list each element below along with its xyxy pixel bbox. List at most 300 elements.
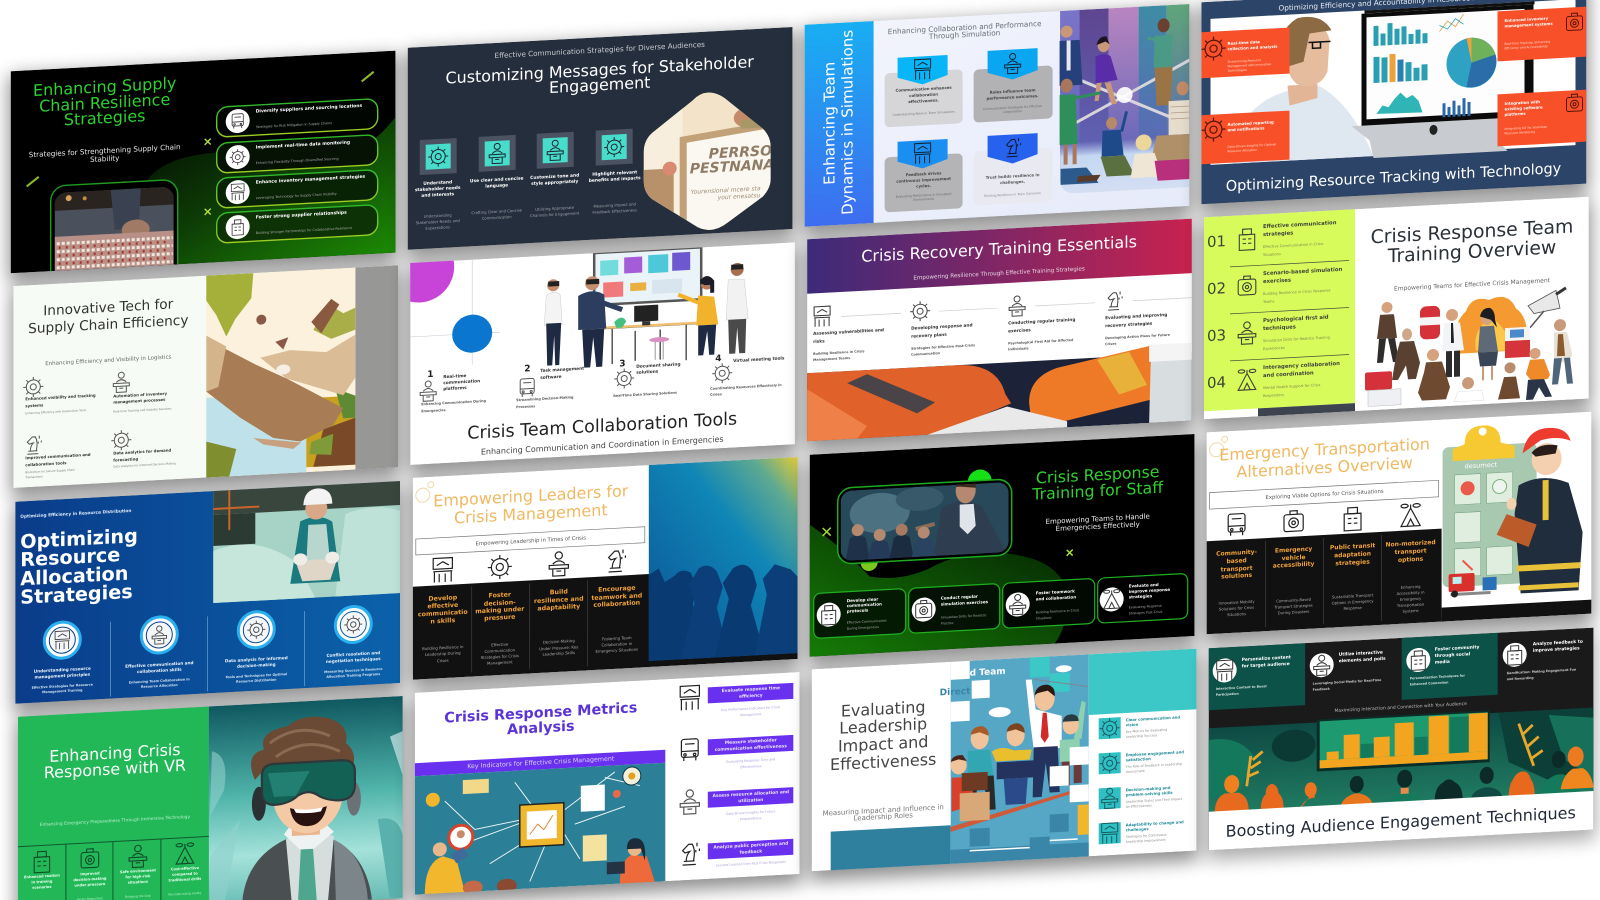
box 4: Strategies Post-Crisis [1129,610,1163,616]
decorative rings [1210,436,1228,457]
callout: software integration [1498,90,1586,146]
column 3 [225,610,288,684]
subtitle: Empowering Teams to Handle [1046,512,1150,526]
tool 2: Task management [540,365,584,374]
item 01: Effective Communication in Crisis [1263,242,1324,249]
tool 1: Enhancing Communication During [421,399,487,406]
column 4 [589,128,641,214]
photo: personalised sign: Yourensional mcere sta [691,185,761,196]
column 3: Utilizing Appropriate [535,204,575,211]
item 3: on Effectiveness [1126,803,1152,809]
column 3: Leadership Skills [542,649,575,656]
column 4: benefits and impacts [589,175,641,183]
item 04: and coordination [1263,370,1314,379]
title: Evaluating [841,697,926,720]
card 2 [974,47,1053,123]
tactic 3 [1406,644,1480,687]
illustration: firefighter with checklist [1443,420,1583,598]
item 1: Leadership Success [1126,733,1157,739]
item: communication tools: collaboration tools [25,460,67,467]
image: leader silhouettes on gradient [649,457,798,661]
illustration: leaders climbing stairs: Lead Team [952,667,1006,680]
column 4: transport [1395,547,1427,556]
column 3: Under Pressure: Key [539,644,579,651]
tool 2: software [540,373,562,381]
item: inventory: Enhance inventory management strategies [256,174,366,186]
column 1: effective [427,601,458,610]
card 2: Roles influence team [990,87,1036,94]
metric 2: Evaluating Response Time and [726,757,775,764]
column 3: style appropriately [531,178,578,187]
step 4: Developing Action Plans for Future [1105,333,1171,340]
column 4: Conflict resolution and [326,650,380,657]
decorative rings [416,482,434,503]
item: diversify suppliers [217,99,378,137]
eyebrow: Optimizing Efficiency in Resource Distribution [20,508,131,520]
column 1: Community- [1216,548,1258,557]
callout: real-time data: collection and analysis [1228,43,1278,51]
column 1 [415,138,461,231]
metric 2: communication effectiveness [715,743,787,753]
metric 1: efficiency [739,692,763,699]
box 4 [1098,573,1188,623]
subtitle: Empowering Teams for Effective Crisis Management [1394,277,1551,293]
title: Crisis Management [454,500,608,527]
subtitle: Leadership Roles [854,811,913,823]
column 2: Use clear and concise [470,175,524,184]
panel: response team training overview [1202,196,1591,429]
column 3: Customize tone and [530,172,579,181]
step 3: Individuals [1008,346,1028,351]
column 4: Transportation [1396,601,1425,608]
column 2: Management [487,659,513,665]
column 3 [534,551,584,657]
card 1: Understanding Roles in Team Simulations [893,110,955,117]
benefit 3: for high-risk [125,874,151,879]
tactic 4: improve strategies [1533,645,1580,653]
title: Crisis Response Team [1371,216,1573,248]
tactic 2 [1310,649,1386,692]
item 4: Strategies for Continuous [1126,833,1167,839]
item 04: Interagency collaboration [1263,361,1340,371]
title: Optimizing Resource Tracking with Technology [1226,161,1562,195]
subtitle: Measuring Impact and Influence in [823,803,944,818]
callout: software integration: existing software [1504,104,1543,111]
item 1: Clear communication and [1126,714,1180,722]
item: communication tools: Blockchain for Secure Supply Chain [25,468,75,474]
tactic 3: through social [1435,651,1471,659]
benefit 2: Improved [80,871,100,876]
item 01: 01 [1207,232,1226,251]
step 2: Communication [911,351,941,357]
subtitle box [416,527,645,555]
column 2: Communication [482,214,512,220]
subtitle: Enhancing Emergency Preparedness Through Immersive Technology [40,814,190,828]
column 3: Resource Distribution [236,678,277,684]
title: Training Overview [1387,237,1556,267]
photo: domino figures [50,179,178,272]
tactic 1: Participation [1216,692,1239,697]
panel: boosting audience engagement [1207,627,1596,860]
item 2: satisfaction [1126,756,1151,762]
box 1: protocols [847,607,869,613]
panel: empowering leaders [411,457,800,690]
item: data analytics [111,427,176,469]
column 1 [418,557,468,664]
tool 4: Coordinating Resources Effectively in [710,383,782,391]
column 4: negotiation techniques [326,656,381,663]
item 3 [1099,784,1183,810]
column 2: decision- [484,599,516,607]
column 4: Encourage [598,584,636,593]
card 1 [885,54,963,127]
decorative half circles [861,469,992,571]
illustration: metrics network [415,763,665,898]
box 3: and collaboration [1036,594,1076,601]
column 3: Tools and Techniques for Optimal [225,672,287,679]
tactic 3: Enhanced Connection [1410,680,1449,686]
photo: personalised sign: PESTNANA [690,157,774,178]
item: diversify suppliers: Diversify suppliers and sourcing locations [256,103,362,115]
item: diversify suppliers: Strategies for Risk Mitigation in Supply Chains [256,121,332,129]
tool 3 [613,356,681,398]
subtitle: Empowering Resilience Through Effective Training Strategies [913,266,1085,282]
panel: crisis recovery training [805,218,1194,451]
illustration: audience watching rising chart [1209,705,1594,813]
column 3: Response [1343,604,1362,610]
column 3: Options in Emergency [1332,598,1374,605]
callout: automated reporting: Data-Driven Insights for Optimal [1228,142,1276,149]
item 03: Psychological first aid [1263,315,1329,324]
item 04 [1207,361,1340,401]
column 2: vehicle [1282,553,1306,562]
column 2: Effective [491,641,509,647]
title: Engagement [549,72,650,97]
column 1: Understand [423,179,452,186]
item 4: challenges [1126,826,1149,832]
callout: inventory systems: Efficiency and Accountability [1504,44,1548,50]
benefit 1: Enhanced realism [24,873,60,879]
subtitle box [1210,480,1439,509]
column 4: Systems [1403,607,1419,613]
header band [807,219,1192,294]
item: communication tools: Improved communication and [25,451,91,460]
subtitle: Maximizing Interaction and Connection with Your Audience [1334,701,1467,714]
metric 2 [681,734,793,772]
item: real-time data: Implement real-time data monitoring [256,140,350,151]
box 1: Effective Communication [847,619,887,625]
subtitle: Stability [90,153,120,164]
column 4 [1386,503,1436,614]
item: inventory [217,170,378,208]
callout: automated reporting: and notifications [1228,125,1265,132]
panel: crisis team collaboration tools [386,214,797,476]
title: Strategies [20,579,133,608]
column 1: solutions [1221,571,1252,580]
tactic 4: and Rewarding [1507,676,1534,681]
tool 4: 4 [715,354,721,364]
callout: inventory systems: Enhanced inventory [1504,15,1549,22]
column 4: Enhancing [1401,583,1421,589]
item 2: The Role of Feedback in Leadership [1125,762,1182,769]
item 2: Employee engagement and [1126,749,1184,757]
tool 4 [710,351,785,397]
illustration: VR team at a board [544,245,748,370]
item 02: 02 [1207,279,1226,298]
card 3 [885,138,963,212]
panel: supply chain efficiency [11,265,400,498]
photo: response team [838,475,1012,564]
item: real-time data [217,135,378,173]
card 3: Environments [913,197,934,202]
step 1: Assessing vulnerabilities and [813,327,884,336]
step 1: Building Resilience in Crisis [813,349,864,356]
decorative sparkles [27,72,374,186]
column 2: Emergency [1275,545,1312,554]
box 4: Evaluating Response [1129,604,1162,610]
box 1: During Emergencies [847,625,879,631]
column 2: Enhancing Team Collaboration in [129,677,190,685]
title: Supply Chain Efficiency [28,313,188,337]
illustration: leaders climbing stairs [940,654,1089,864]
column 3: adaptation [1334,550,1371,559]
title: Customizing Messages for Stakeholder [446,52,754,87]
item: real-time data: Enhancing Flexibility Through Diversified Sourcing [256,157,339,165]
item 03: Experiences [1263,346,1285,351]
column 1: Crises [437,657,449,663]
item 3: problem-solving skills [1126,789,1173,797]
column 2: Community-Based [1276,596,1312,603]
tactic 2: elements and polls [1339,655,1386,664]
card 2: Cooperation [1003,109,1022,114]
band: Key Indicators for Effective Crisis Management [467,755,615,770]
item 02 [1207,267,1342,307]
tactic 3: Foster community [1435,644,1480,652]
item 02: Teams [1262,300,1274,304]
tactic 1: for target audience [1242,660,1290,669]
title: Crisis Team Collaboration Tools [467,409,737,444]
item: visibility and tracking: systems [25,402,44,408]
metric 1: Management [740,712,762,717]
panel: training for staff [808,434,1197,667]
item 04: Responders [1263,393,1284,398]
step 3: Conducting regular training [1008,316,1075,326]
column 4: Emergency Situations [596,646,638,653]
item: inventory automation: management processes [113,396,166,404]
card 3: cycles. [916,182,932,188]
card 1: Communication enhances [895,84,952,92]
column 1: Innovative Mobility [1219,598,1255,605]
title: Crisis Response Metrics [444,700,637,727]
title: Innovative Tech for [43,296,174,319]
column 1: Management Training [42,688,83,694]
column 1 [1216,513,1258,617]
benefit 4 [168,842,202,897]
step 2 [910,298,975,357]
tactic 4 [1503,638,1583,681]
item 04: Mental Health Support for Crisis [1263,383,1321,390]
callout: real-time data: Real-time data [1228,39,1260,45]
item 4 [1099,819,1184,845]
item: suppliers: Building Stronger Partnerships for Collaborative Resilience [256,226,352,235]
callout: inventory systems [1498,7,1586,61]
tool 3: Document sharing [636,361,681,369]
column 3: Data analysis for informed [225,655,288,663]
item: inventory automation [113,369,172,414]
column 1: Expectations [425,224,450,230]
column 4: collaboration [593,599,640,608]
item 02: Scenario-based simulation [1263,267,1342,277]
metric 3 [680,784,793,824]
column 2: Communication [484,647,516,653]
subtitle: Through Simulation [928,28,1000,41]
title: Optimizing [20,524,138,553]
tactic 1: Personalize content [1242,654,1291,663]
photo: analyst at monitor [1210,0,1576,167]
title: Resource [20,543,120,571]
box 3: Foster teamwork [1036,588,1075,595]
band [415,750,665,776]
tactic 4: Gamification: Making Engagement Fun [1507,667,1577,675]
panel: resource allocation strategies [13,481,402,714]
column 4 [324,605,383,679]
tactic 4: Analyze feedback to [1533,638,1583,647]
item: inventory automation: Real-time Tracking and Visibility Solutions [113,406,172,414]
callout: automated reporting [1202,111,1290,164]
metric 4: feedback [739,848,762,855]
step 1: risks [813,338,825,344]
column 1: stakeholder needs [415,184,461,193]
photo: warehouse worker [213,481,400,603]
metric 1 [680,680,793,720]
photo: personalised sign: your enesatsu [717,192,761,202]
column 4: Non-motorized [1386,538,1436,548]
item 02: Building Resilience in Crisis Response [1263,288,1331,296]
metric 3: Assess resource allocation and [713,789,789,799]
column 4: Collaboration in [601,640,633,647]
item 1: Key Metrics for Evaluating [1126,728,1167,734]
title: Strategies [64,106,146,129]
column 2: Strategies for Crisis [481,652,519,660]
item: data analytics: Data analytics for demand [113,447,172,455]
item 2: Assessment [1126,769,1146,774]
tactic 1 [1213,654,1291,697]
callout: real-time data: Management with Innovative [1228,62,1271,68]
title: Crisis Response [1036,461,1159,487]
box 4: Evaluate and [1129,581,1159,588]
item 3: Leadership Styles and Their Impact [1126,797,1183,804]
tactic 2: Feedback [1313,687,1331,692]
column 2: Effective communication and [125,660,193,668]
column 3: Build [550,588,568,596]
tactic 1: Interactive Content to Boost [1216,684,1267,691]
box 2: Simulation Drills for Realistic [941,613,987,620]
title: Analysis [507,719,575,738]
column 4: Measuring Impact and [593,201,636,208]
column 1: Leadership During [425,650,461,657]
card 3: Feedback drives [906,170,942,177]
column 2: During Disasters [1278,608,1309,615]
tactic 2: Leveraging Social Media for Real-Time [1313,678,1381,686]
callout: software integration: Integration with [1504,99,1540,105]
benefit 2: decision-making [73,876,107,882]
illustration: leaders climbing stairs: Direct [940,687,971,698]
panel: emergency transportation [1205,411,1594,644]
column 2: making under [475,605,525,615]
title: Allocation [20,561,128,590]
item 03: Simulation Drills for Realistic Training [1263,336,1330,343]
column 4 [591,549,642,654]
benefit 1: in training [31,879,53,884]
column 3: decision-making [237,661,276,668]
metric 4: Lessons Learned from Past Crisis Responses [716,860,786,868]
column 2 [475,554,525,666]
box 3 [1003,578,1095,628]
callout: real-time data [1202,28,1290,78]
subtitle box: Exploring Viable Options for Crisis Situations [1266,489,1384,501]
card 1: collaboration [909,91,938,98]
tool 2 [516,361,584,409]
benefit 3 [120,844,156,899]
subtitle: Enhancing Communication and Coordination in Emergencies [481,435,724,457]
title: Chain Resilience [39,89,170,115]
title: Enhancing Team [821,61,839,185]
box 3: Building Resilience in Crisis [1036,608,1080,615]
column 1: Develop [428,594,458,602]
column 2: pressure [484,613,515,622]
item 2 [1099,749,1184,775]
tool 1 [420,367,487,413]
column 2: Foster [489,591,512,599]
title: Boosting Audience Engagement Techniques [1226,803,1576,841]
tool 3: 3 [619,359,625,369]
column 3: adaptability [537,603,580,612]
panel: crisis response metrics [413,672,802,900]
column 1: Stakeholder Needs and [416,217,460,225]
illustration: firefighter with checklist: desurnect [1465,461,1497,470]
column 2 [1273,510,1315,615]
subtitle: Strategies for Strengthening Supply Chain [29,142,181,159]
column 1: and interests [421,191,455,198]
step 4: recovery strategies [1105,320,1153,329]
metric 1: Evaluate response time [722,685,780,694]
box 3: Situations [1036,616,1052,621]
item 03 [1207,315,1330,354]
column 3 [1330,506,1375,611]
callout: automated reporting: Resource Allocation [1228,148,1257,153]
column 4: Highlight relevant [592,169,637,177]
column 2: language [485,182,508,189]
column 1: transport [1221,564,1253,573]
item: suppliers [217,205,378,243]
column 1: based [1226,557,1247,565]
box 2: Conduct regular [941,593,978,600]
title: Leadership [839,714,927,737]
benefit 4: compared to [172,872,198,877]
photo: personalised sign [644,92,771,230]
subtitle: Emergencies Effectively [1056,520,1140,533]
tool 1: Emergencies [421,408,446,413]
step 2: recovery plans [911,331,947,339]
benefit 3: Bridging the Gap [125,894,151,899]
metric 2: Measure stakeholder [725,737,778,746]
column 1 [32,620,94,695]
column 2: Resource Allocation [141,683,178,689]
title: Impact and [838,732,928,755]
illustration: crisis team and fire [1365,287,1573,409]
item 4: Leadership Improvement [1126,838,1166,844]
metric 3: utilization [738,796,763,804]
